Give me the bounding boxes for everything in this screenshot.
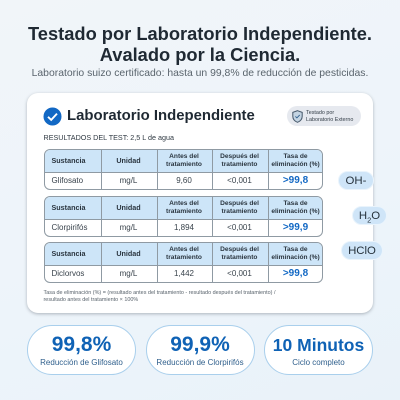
table: Glifosato: Unidad	[116, 156, 141, 165]
icon: shield	[292, 110, 303, 123]
badge: external lab	[287, 106, 361, 126]
table: Diclorvos: >99,8	[283, 268, 308, 279]
panel heading: Laboratorio Independiente	[67, 108, 255, 124]
table: Clorpirifós: mg/L	[120, 222, 137, 232]
stat: clorpirifos: Reducción de Clorpirifós	[156, 358, 244, 366]
table: Diclorvos: Sustancia	[52, 249, 85, 258]
subtitle: Laboratorio suizo certificado: hasta un 99,8% de reducción de pesticidas.	[32, 68, 368, 78]
table: Glifosato: Tasa de	[283, 153, 308, 160]
table: Clorpirifós: Tasa de	[283, 200, 308, 206]
stat: glifosato: Reducción de Glifosato	[40, 358, 123, 366]
badge label: Laboratorio Externo	[306, 117, 353, 123]
table: Diclorvos: Antes del	[169, 246, 199, 253]
table: Diclorvos: 1,442	[174, 269, 194, 278]
table: Glifosato: >99,8	[283, 175, 308, 186]
formula footnote: resultado antes del tratamiento × 100%	[44, 296, 138, 302]
table: Glifosato: Sustancia	[52, 156, 85, 165]
bubble: OH-	[338, 171, 374, 190]
stat: glifosato	[27, 325, 136, 375]
table: Glifosato: Después del	[220, 153, 259, 160]
table: Diclorvos: Diclorvos	[52, 269, 84, 278]
stat: cycle time: Ciclo completo	[292, 358, 345, 366]
table: Glifosato: Antes del	[169, 153, 199, 160]
bubble: HClO: HClO	[348, 245, 376, 257]
formula footnote	[44, 290, 276, 302]
table: Clorpirifós: Unidad	[116, 202, 141, 212]
stat: clorpirifos: 99,9%	[170, 332, 230, 356]
table: Diclorvos: Unidad	[116, 249, 141, 258]
panel: laboratory results	[27, 93, 373, 313]
title: Testado por Laboratorio Independiente.	[28, 22, 372, 44]
table: Glifosato: tratamiento	[166, 161, 202, 168]
table: Clorpirifós: Antes del	[169, 200, 199, 206]
table: Diclorvos: Tasa de	[283, 246, 308, 253]
table: Clorpirifós	[44, 196, 323, 236]
bubble: H2O	[352, 206, 387, 225]
table: Diclorvos: <0,001	[227, 269, 252, 278]
table: Diclorvos: tratamiento	[166, 254, 202, 261]
formula footnote: Tasa de eliminación (%) = (resultado antes del tratamiento - resultado después del tratamiento) /	[44, 290, 275, 296]
bubble: HClO	[341, 241, 383, 260]
table: Clorpirifós: 1,894	[174, 222, 194, 232]
table: Clorpirifós: tratamiento	[222, 208, 257, 214]
table: Glifosato: tratamiento	[222, 161, 257, 168]
table: Glifosato	[44, 149, 323, 190]
bubble: H2O: H2O	[359, 210, 380, 224]
table: Diclorvos: tratamiento	[222, 254, 257, 261]
test conditions: RESULTADOS DEL TEST: 2,5 L de agua	[44, 133, 174, 142]
table: Clorpirifós: >99,9	[283, 222, 308, 232]
bubble: OH-: OH-	[346, 175, 366, 187]
table: Clorpirifós: Sustancia	[52, 202, 85, 212]
stat: clorpirifos	[146, 325, 254, 375]
table: Diclorvos	[44, 242, 323, 283]
stat: glifosato: 99,8%	[52, 332, 111, 356]
table: Clorpirifós: tratamiento	[166, 208, 202, 214]
table: Clorpirifós: <0,001	[227, 222, 252, 232]
title	[28, 22, 372, 65]
stat: cycle time	[264, 325, 373, 375]
table: Diclorvos: Después del	[220, 246, 259, 253]
table: Glifosato: mg/L	[120, 176, 137, 185]
badge label: Testado por	[306, 110, 334, 116]
table: Glifosato: 9,60	[176, 176, 192, 185]
table: Glifosato: eliminación (%)	[271, 161, 320, 168]
table: Clorpirifós: Después del	[220, 200, 259, 206]
icon: blue check badge	[44, 108, 62, 126]
table: Clorpirifós: eliminación (%)	[271, 208, 320, 214]
title: Avalado por la Ciencia.	[100, 44, 300, 64]
table: Diclorvos: eliminación (%)	[271, 254, 320, 261]
table: Clorpirifós: Clorpirifós	[52, 222, 88, 232]
badge label	[306, 110, 354, 123]
table: Glifosato: Glifosato	[52, 176, 83, 185]
table: Glifosato: <0,001	[227, 176, 252, 185]
stat: cycle time: 10 Minutos	[273, 334, 364, 354]
table: Diclorvos: mg/L	[120, 269, 137, 278]
